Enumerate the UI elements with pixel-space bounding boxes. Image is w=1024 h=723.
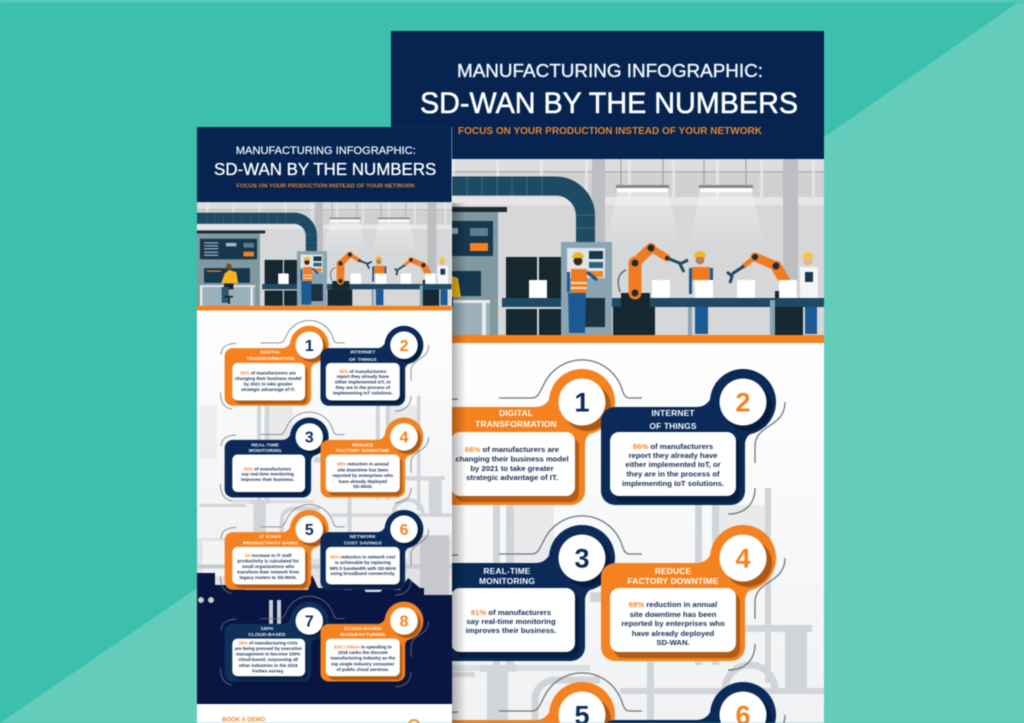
card 6 small: NETWORK bbox=[350, 534, 376, 540]
card 7 small: 100% bbox=[260, 626, 274, 632]
card 2 internet of things large: 2 bbox=[735, 388, 751, 418]
dark city and factory silhouette bbox=[197, 573, 452, 704]
body background with pipes large bbox=[451, 342, 825, 723]
card 8 small: $19.7 billion in spending in bbox=[334, 645, 392, 650]
scaled page artwork bbox=[196, 126, 452, 596]
card 1 digital transformation large: strategic advantage of IT. bbox=[466, 473, 558, 482]
card 7 small: are being pressed by executive bbox=[235, 646, 302, 651]
card 2 internet of things large: implementing IoT solutions. bbox=[622, 479, 724, 488]
card 6 small: COST SAVINGS bbox=[344, 541, 382, 547]
shadow cast by small page bbox=[452, 203, 466, 723]
card 6 top large bbox=[601, 682, 785, 723]
card 1 digital transformation large: 1 bbox=[574, 388, 590, 418]
card 6 small: is achievable by replacing bbox=[335, 560, 391, 565]
card 7 small bbox=[221, 596, 345, 685]
card 4 small: 69% reduction in annual bbox=[337, 462, 389, 467]
card 2 small: OF THINGS bbox=[349, 357, 377, 363]
card 8 small: MANUFACTURING bbox=[340, 632, 385, 638]
card 3 small: say real-time monitoring bbox=[241, 472, 294, 477]
card 2 small: they are in the process of bbox=[335, 385, 391, 390]
header band small bbox=[197, 127, 452, 202]
card 2 small: 2 bbox=[400, 338, 409, 355]
card 7 small: other industries in the 2019 bbox=[239, 663, 298, 668]
card 4 small: site downtime has been bbox=[337, 468, 389, 473]
card 4 small bbox=[320, 418, 429, 503]
card 5 top large bbox=[431, 673, 642, 723]
card 5 small: small organizations who bbox=[242, 564, 295, 569]
card 5 small: legacy routers to SD-WAN. bbox=[240, 575, 297, 580]
card 3 real-time monitoring large: REAL-TIME bbox=[483, 566, 531, 576]
card 4 reduce factory downtime large: site downtime has been bbox=[630, 610, 717, 619]
card 2 internet of things large: either implemented IoT, or bbox=[625, 460, 721, 469]
card 1 digital transformation large: DIGITAL bbox=[499, 408, 533, 418]
panel: small infographic page bbox=[197, 127, 452, 723]
card 4 small: reported by enterprises who bbox=[332, 473, 393, 478]
card 5 small: 5 bbox=[305, 522, 314, 539]
card 4 reduce factory downtime large bbox=[601, 525, 785, 670]
card 6 small: 6 bbox=[400, 522, 409, 539]
card 4 small: SD-WAN. bbox=[353, 484, 373, 489]
card 7 small: CLOUD-BASED bbox=[248, 632, 286, 638]
card 2 small: either implemented IoT, or bbox=[335, 379, 391, 384]
card 1 digital transformation large: changing their business model bbox=[455, 454, 569, 464]
card 3 small: 81% of manufacturers bbox=[244, 466, 292, 471]
card 7 small: 39% of manufacturing CIOs bbox=[239, 640, 298, 645]
card 1 digital transformation large: 66% of manufacturers are bbox=[465, 445, 560, 454]
card 4 small: have already deployed bbox=[339, 479, 387, 484]
card 5 small: IT STAFF bbox=[260, 534, 282, 540]
card 4 reduce factory downtime large: SD-WAN. bbox=[656, 638, 690, 647]
header band small: MANUFACTURING INFOGRAPHIC: bbox=[236, 145, 416, 157]
card 5 small: productivity is calculated for bbox=[237, 558, 299, 563]
card 3 small: 3 bbox=[305, 429, 314, 446]
factory illustration large bbox=[451, 158, 825, 344]
card 8 small: manufacturing industry as the bbox=[330, 656, 396, 661]
card 1 digital transformation large: by 2021 to take greater bbox=[470, 464, 554, 473]
card 7 small: Forbes survey. bbox=[252, 668, 284, 673]
card 8 small: CLOUD-BASED bbox=[344, 626, 382, 632]
panel: large infographic page bbox=[391, 31, 824, 723]
card 8 small: of public cloud services. bbox=[336, 667, 389, 672]
header band large: FOCUS ON YOUR PRODUCTION INSTEAD OF YOUR NETWORK bbox=[458, 126, 763, 137]
card 4 reduce factory downtime large: REDUCE bbox=[655, 566, 691, 576]
card 6 small: MPLS bandwidth with SD-WAN bbox=[330, 566, 396, 571]
header band large: SD-WAN BY THE NUMBERS bbox=[420, 87, 798, 120]
card 4 reduce factory downtime large: have already deployed bbox=[632, 629, 715, 638]
card 1 small: TRANSFORMATION bbox=[247, 356, 295, 362]
card 6 small bbox=[320, 510, 429, 595]
card 6 small: using broadband connectivity. bbox=[330, 571, 395, 576]
card 3 small: MONITORING bbox=[249, 448, 282, 454]
card 2 small: implementing IoT solutions. bbox=[333, 391, 393, 396]
card 3 small: REAL-TIME bbox=[251, 442, 280, 448]
card 4 small: 4 bbox=[400, 429, 409, 446]
footer strip small bbox=[197, 704, 452, 723]
card 1 small: strategic advantage of IT. bbox=[241, 387, 295, 392]
card 2 small: 86% of manufacturers bbox=[339, 369, 387, 374]
card 4 reduce factory downtime large: 69% reduction in annual bbox=[629, 600, 717, 609]
card 5 small: 5X increase in IT staff bbox=[245, 553, 292, 558]
card 4 reduce factory downtime large: reported by enterprises who bbox=[621, 619, 725, 628]
cards group small bbox=[221, 320, 429, 687]
card 1 small: 1 bbox=[305, 338, 314, 355]
card 1 digital transformation large: TRANSFORMATION bbox=[475, 419, 557, 429]
card 4 reduce factory downtime large: 4 bbox=[735, 544, 751, 574]
card 1 small: changing their business model bbox=[235, 376, 301, 381]
card 1 small: 66% of manufacturers are bbox=[241, 371, 296, 376]
card 7 small: management to become 100% bbox=[236, 652, 300, 657]
card 5 small: transform their network from bbox=[237, 570, 299, 575]
card 2 internet of things large: 86% of manufacturers bbox=[633, 442, 713, 451]
card 2 internet of things large bbox=[601, 369, 785, 514]
card 2 internet of things large: they are in the process of bbox=[626, 470, 720, 478]
card 6 small: 80% reduction in network cost bbox=[330, 555, 396, 560]
card 7 small: 7 bbox=[305, 614, 314, 631]
card 2 small: INTERNET bbox=[350, 349, 376, 355]
header band large: MANUFACTURING INFOGRAPHIC: bbox=[457, 60, 763, 81]
body background with pipes small bbox=[196, 395, 452, 596]
card 1 small bbox=[221, 320, 345, 409]
card 4 reduce factory downtime large: FACTORY DOWNTIME bbox=[627, 576, 719, 586]
card 3 real-time monitoring large: 3 bbox=[574, 544, 590, 574]
card 2 internet of things large: report they already have bbox=[629, 451, 718, 460]
card 3 small: improves their business. bbox=[241, 477, 294, 482]
card 2 internet of things large: INTERNET bbox=[651, 408, 695, 418]
card 3 real-time monitoring large: improves their business. bbox=[466, 626, 556, 635]
card 3 small bbox=[221, 412, 345, 501]
factory illustration small bbox=[197, 202, 452, 310]
card 7 small: cloud-based, surpassing all bbox=[238, 657, 298, 662]
card 3 real-time monitoring large: 81% of manufacturers bbox=[471, 608, 551, 617]
card 3 real-time monitoring large bbox=[451, 514, 642, 662]
card 8 small: 2018 ranks the discrete bbox=[338, 650, 388, 655]
card 8 small: 8 bbox=[400, 614, 409, 631]
card 4 small: FACTORY DOWNTIME bbox=[336, 448, 390, 454]
card 3 real-time monitoring large: say real-time monitoring bbox=[466, 617, 556, 626]
card 8 small bbox=[320, 602, 429, 687]
header band large bbox=[391, 31, 824, 159]
card 8 small: top single industry consumer bbox=[331, 661, 395, 666]
card 1 digital transformation large bbox=[451, 358, 642, 506]
card 5 small: PRODUCTIVITY GAINS bbox=[243, 541, 299, 547]
card 2 small bbox=[320, 326, 429, 411]
card 4 small: REDUCE bbox=[352, 442, 374, 448]
card 1 small: DIGITAL bbox=[261, 349, 281, 355]
card 5 small bbox=[221, 504, 345, 593]
card 3 real-time monitoring large: MONITORING bbox=[479, 576, 535, 586]
header band small: SD-WAN BY THE NUMBERS bbox=[214, 159, 436, 179]
card 2 small: report they already have bbox=[337, 374, 389, 379]
card 2 internet of things large: OF THINGS bbox=[649, 421, 697, 431]
card 1 small: by 2021 to take greater bbox=[244, 382, 293, 387]
header band small: FOCUS ON YOUR PRODUCTION INSTEAD OF YOUR NETWORK bbox=[236, 184, 416, 190]
